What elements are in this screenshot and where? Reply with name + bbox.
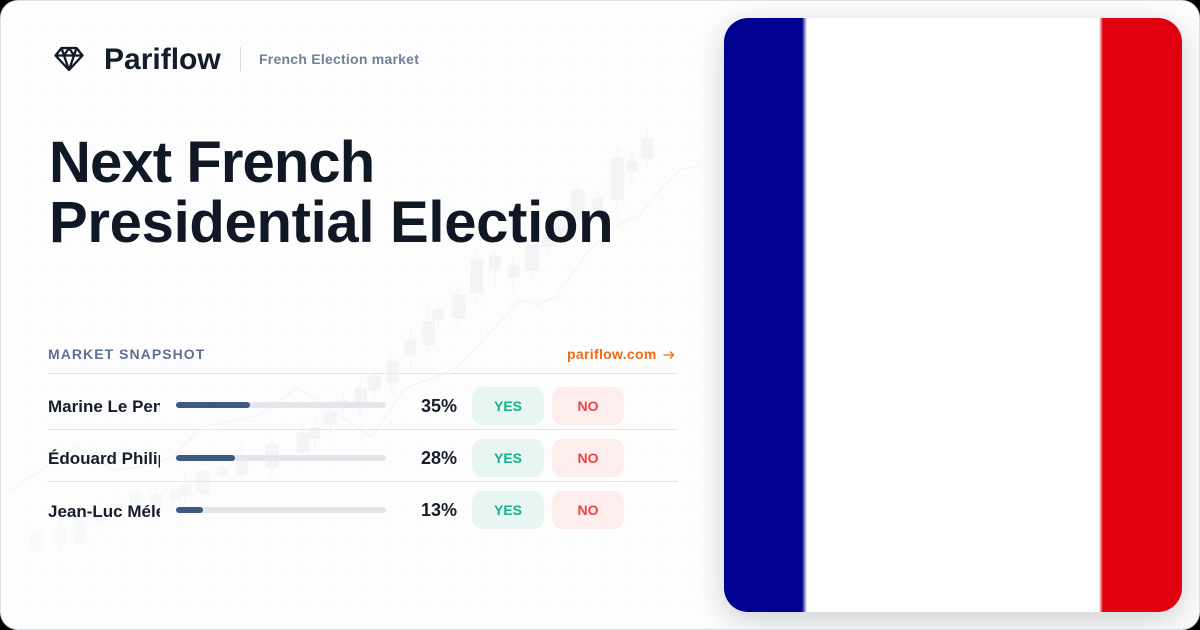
row: Marine Le Pen: Marine Le Pen bbox=[48, 397, 160, 416]
title bbox=[49, 130, 613, 255]
brand name: Pariflow bbox=[104, 43, 221, 76]
row: Marine Le Pen: NO bbox=[578, 398, 598, 414]
row: Jean-Luc Mélenchon: YES bbox=[494, 502, 522, 518]
row: Édouard Philippe: NO bbox=[578, 450, 598, 466]
title: Presidential Election bbox=[49, 190, 613, 255]
subtitle: French Election market bbox=[259, 51, 419, 67]
header divider bbox=[240, 47, 241, 71]
row rule 1 bbox=[48, 373, 678, 374]
market snapshot panel bbox=[48, 346, 657, 362]
row: Marine Le Pen bbox=[48, 387, 624, 425]
row rule 3 bbox=[48, 481, 678, 482]
snapshot heading: MARKET SNAPSHOT bbox=[48, 346, 205, 362]
row: Édouard Philippe bbox=[48, 439, 624, 477]
icon: link arrow bbox=[664, 351, 674, 359]
row rule 2 bbox=[48, 429, 678, 430]
row: Édouard Philippe: 28% bbox=[421, 448, 457, 468]
row: Jean-Luc Mélenchon: 13% bbox=[421, 500, 457, 520]
row: Marine Le Pen: 35% bbox=[421, 396, 457, 416]
title: Next French bbox=[49, 130, 374, 195]
row: Jean-Luc Mélenchon bbox=[48, 491, 624, 529]
row: Jean-Luc Mélenchon: NO bbox=[578, 502, 598, 518]
site link: pariflow.com bbox=[567, 346, 657, 362]
row: Marine Le Pen: YES bbox=[494, 398, 522, 414]
logo: diamond icon bbox=[54, 46, 84, 72]
French flag image bbox=[724, 18, 1182, 612]
row: Édouard Philippe: YES bbox=[494, 450, 522, 466]
